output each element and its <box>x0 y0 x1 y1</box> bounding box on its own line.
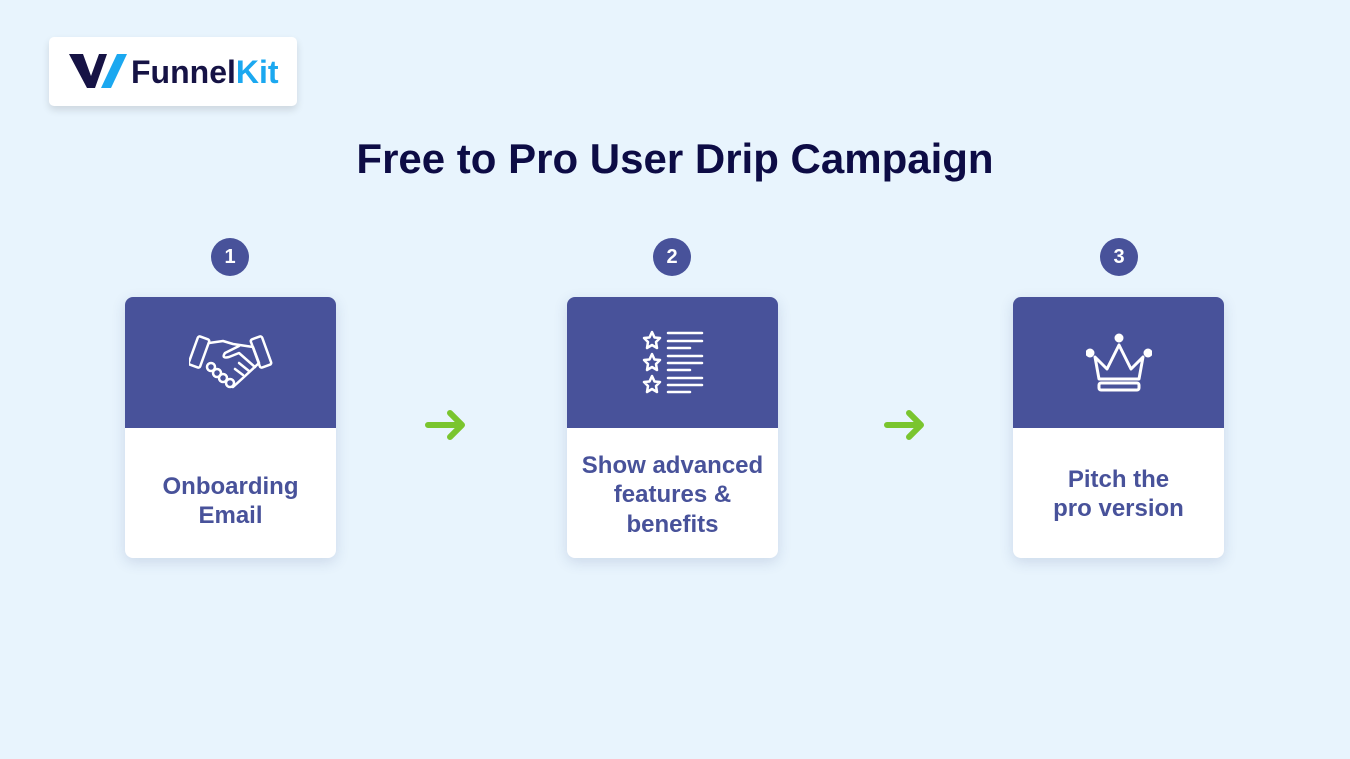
title: Free to Pro User Drip Campaign <box>356 135 994 182</box>
text: Show advanced features & benefits: Show advanced <box>582 452 763 479</box>
step number 3: 3 <box>1113 246 1125 268</box>
text: Onboarding Email: Onboarding <box>162 472 298 500</box>
step number 1 <box>211 238 249 276</box>
text: Pitch the pro version: pro version <box>1053 495 1184 522</box>
arrow 2 <box>884 410 924 440</box>
card 2 <box>567 297 778 558</box>
text: Onboarding Email <box>162 472 298 529</box>
step number 1: 1 <box>224 246 236 268</box>
card 3 <box>1013 297 1224 558</box>
logo: FunnelKit <box>131 54 279 90</box>
icon: feature list <box>642 330 704 394</box>
text: Show advanced features & benefits <box>582 452 763 538</box>
step number 3 <box>1100 238 1138 276</box>
text: Pitch the pro version: Pitch the <box>1068 466 1169 492</box>
arrow 1 <box>425 410 465 440</box>
text: Onboarding Email: Email <box>198 502 262 529</box>
card 1 <box>125 297 336 558</box>
text: Show advanced features & benefits: features & <box>614 481 731 508</box>
text: Show advanced features & benefits: benefits <box>626 511 718 538</box>
icon: handshake <box>189 335 272 388</box>
step number 2 <box>653 238 691 276</box>
logo <box>49 37 297 106</box>
icon: crown <box>1086 334 1152 392</box>
step number 2: 2 <box>666 246 678 268</box>
text: Pitch the pro version <box>1053 466 1184 522</box>
